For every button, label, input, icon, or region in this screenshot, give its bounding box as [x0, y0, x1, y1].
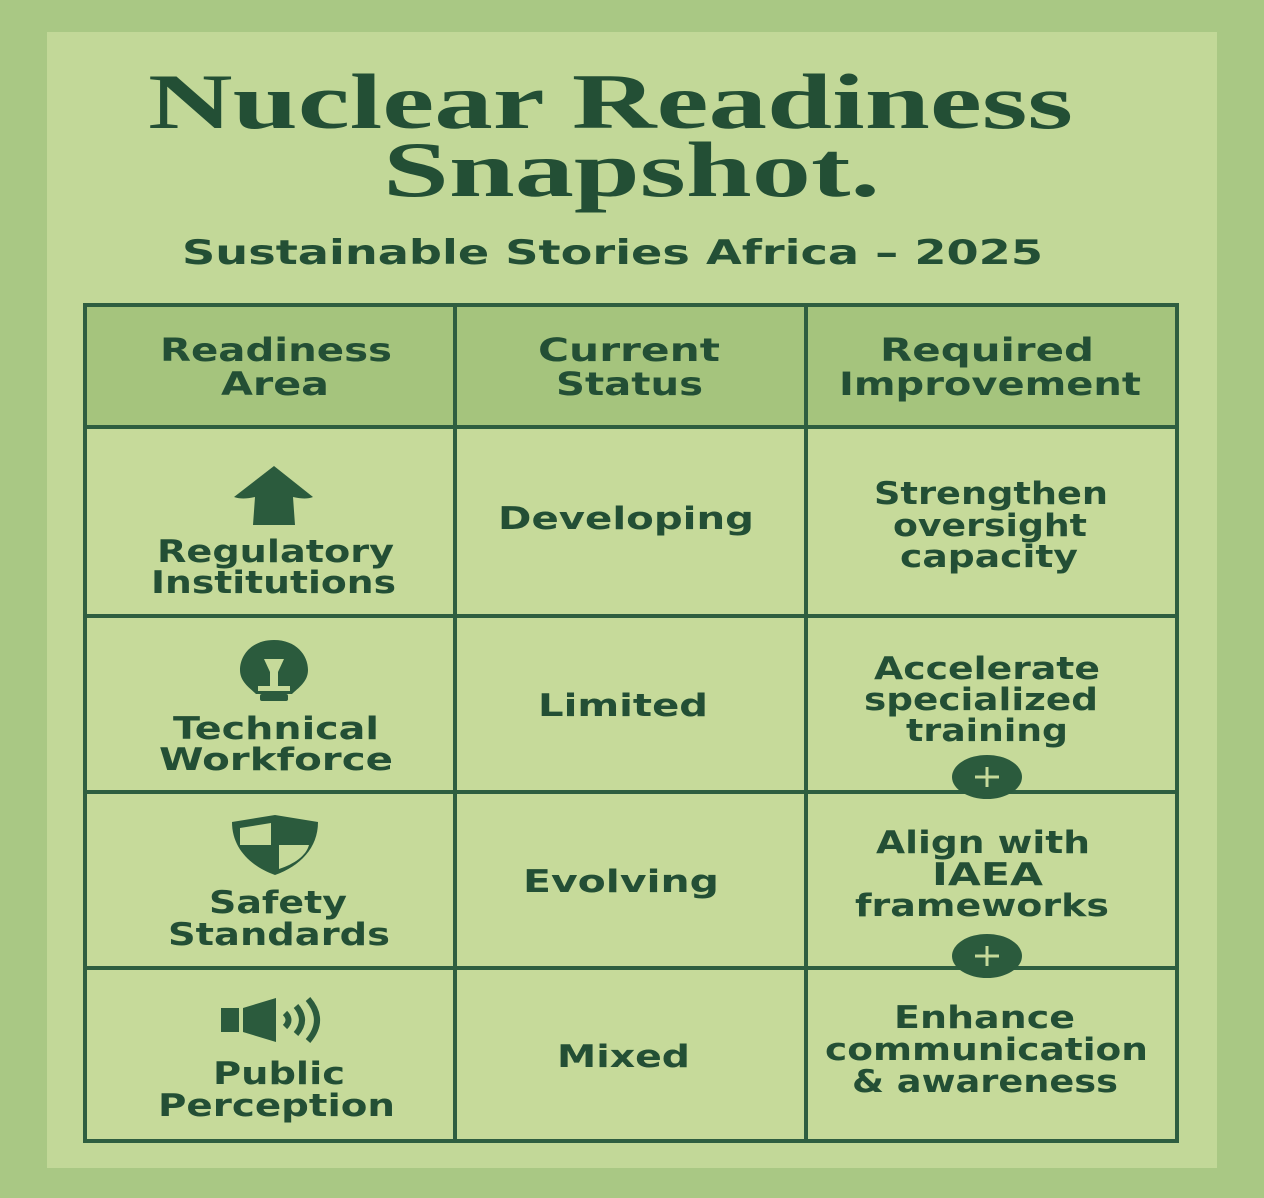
table header row: Area — [221, 365, 329, 403]
row: regulatory institutions: capacity — [900, 539, 1078, 575]
row: public perception: communication — [825, 1032, 1148, 1068]
title — [148, 58, 1073, 213]
table header row — [84, 304, 1178, 427]
row: safety standards — [168, 815, 1109, 953]
row: technical workforce: Accelerate — [874, 651, 1100, 687]
table header row: Status — [556, 365, 703, 403]
row: public perception: Mixed — [557, 1039, 690, 1075]
row: safety standards: Standards — [168, 917, 390, 953]
title: Nuclear Readiness — [148, 58, 1073, 145]
icon: speaker — [221, 998, 317, 1042]
subtitle: Sustainable Stories Africa – 2025 — [182, 233, 1043, 273]
row: regulatory institutions: Regulatory — [157, 534, 394, 570]
row: regulatory institutions: oversight — [893, 508, 1087, 544]
icon: shield — [232, 815, 318, 875]
row: technical workforce: Technical — [173, 711, 379, 747]
row: safety standards: Evolving — [523, 864, 719, 900]
row: public perception: & awareness — [852, 1064, 1118, 1100]
row: safety standards: frameworks — [855, 888, 1109, 924]
row: public perception: Enhance — [894, 1000, 1075, 1036]
table header row: Readiness — [160, 331, 392, 369]
row: public perception: Public — [213, 1056, 345, 1092]
icon: plus badge 2 — [952, 934, 1022, 978]
row: regulatory institutions: Institutions — [151, 565, 396, 601]
row: safety standards: Safety — [209, 885, 347, 921]
table header row: Current — [538, 331, 720, 369]
table header row: Required — [880, 331, 1094, 369]
row: technical workforce: Workforce — [159, 742, 393, 778]
row: regulatory institutions: Developing — [498, 501, 754, 537]
row: regulatory institutions: Strengthen — [874, 476, 1108, 512]
table header row: Improvement — [839, 365, 1141, 403]
icon: up arrow — [234, 466, 313, 525]
row: public perception: Perception — [158, 1088, 395, 1124]
row: technical workforce: specialized — [864, 682, 1098, 718]
row: public perception — [158, 998, 1148, 1124]
row: safety standards: Align with — [876, 825, 1090, 861]
icon: plus badge 1 — [952, 755, 1022, 799]
row: technical workforce — [159, 640, 1100, 778]
row: regulatory institutions — [151, 466, 1108, 601]
table — [84, 304, 1178, 1142]
icon: light bulb — [240, 640, 308, 701]
title: Snapshot. — [383, 126, 880, 213]
row: technical workforce: Limited — [538, 688, 708, 724]
row: technical workforce: training — [906, 713, 1068, 749]
row: safety standards: IAEA — [932, 857, 1043, 893]
